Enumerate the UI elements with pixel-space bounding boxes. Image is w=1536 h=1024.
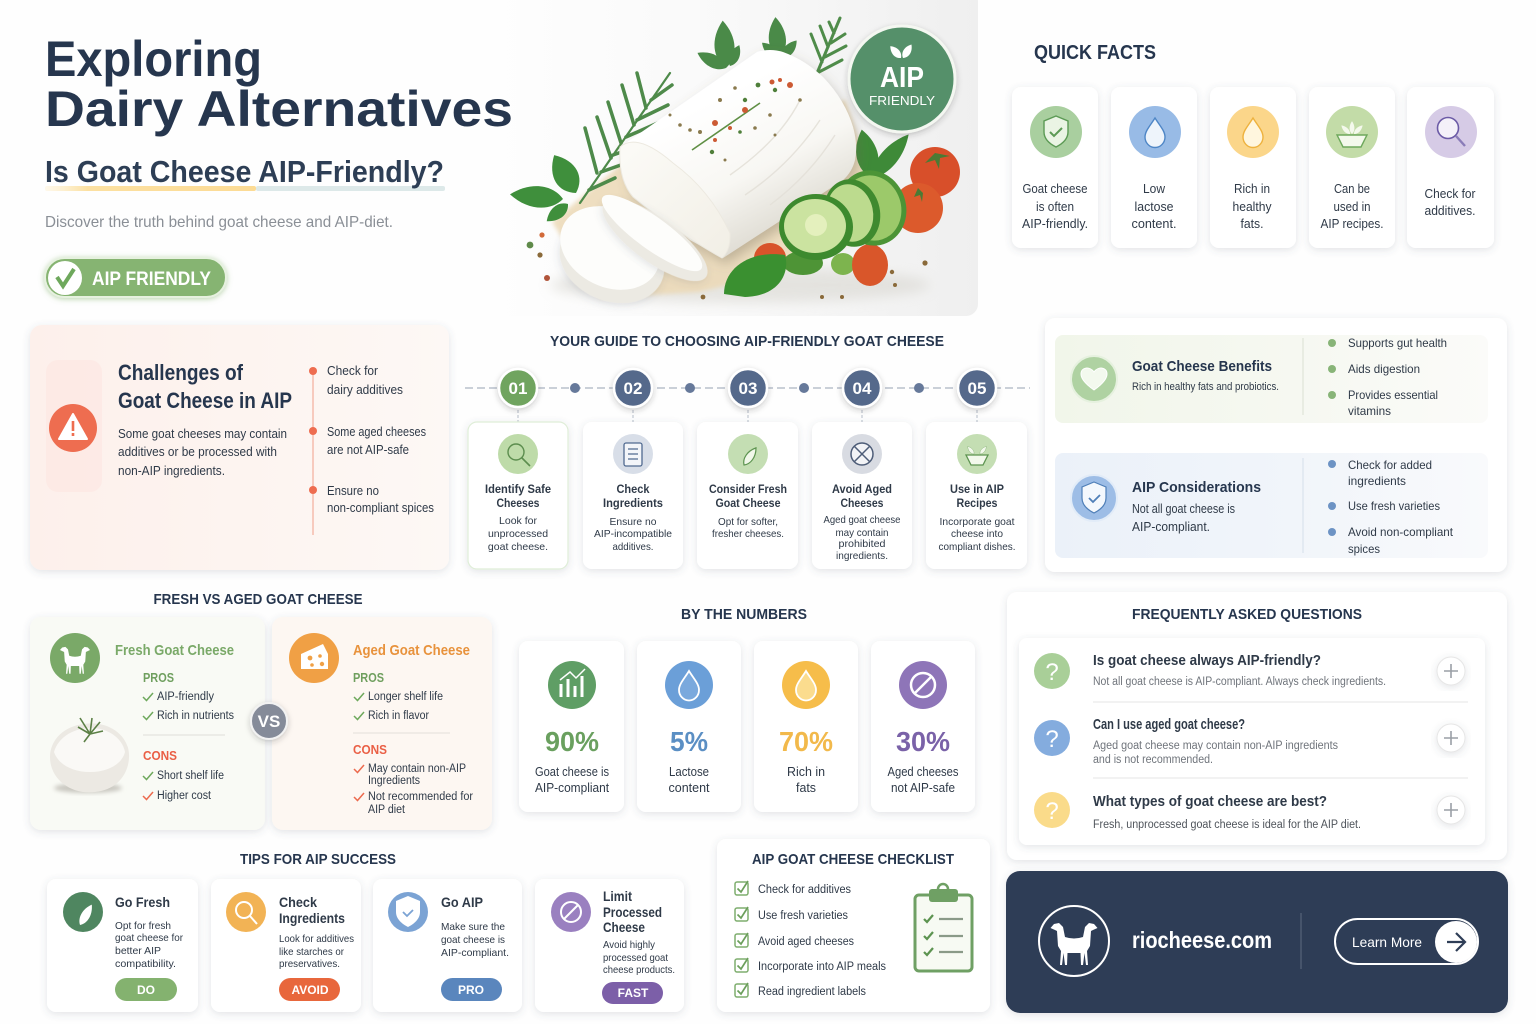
fact card: low lactose [1111, 87, 1197, 248]
aged goat cheese card: Not recommended for [368, 791, 473, 803]
aged goat cheese card: AIP diet [368, 804, 406, 816]
heading: quick facts: QUICK FACTS [1034, 42, 1156, 64]
challenges list: Some aged cheeses [327, 425, 426, 439]
tip: limit processed cheese: Cheese [603, 919, 645, 935]
challenges description: non-AIP ingredients. [118, 463, 225, 478]
step 01: unprocessed [488, 528, 548, 540]
panel: AIP goat cheese checklist [717, 839, 990, 1012]
AIP friendly pill [45, 258, 226, 297]
tip: go fresh: DO [137, 983, 155, 997]
aged goat cheese card: Longer shelf life [368, 691, 443, 703]
fact card: additives [1407, 87, 1494, 248]
step 04: 04 [853, 379, 872, 398]
goat cheese benefits: Provides essential [1348, 388, 1438, 402]
fact card: AIP recipes [1309, 87, 1395, 248]
step 05: Use in AIP [950, 482, 1004, 496]
AIP considerations: ingredients [1348, 474, 1406, 488]
stat: 30%: not AIP-safe [891, 781, 955, 795]
stat: 70%: Rich in [787, 765, 825, 779]
question 3: Fresh, unprocessed goat cheese is ideal for the AIP diet. [1093, 819, 1361, 831]
question 2: Aged goat cheese may contain non-AIP ingredients [1093, 740, 1338, 752]
checklist items: Check for additives [758, 884, 851, 896]
learn more button [1335, 919, 1478, 964]
fresh goat cheese card: AIP-friendly [157, 691, 214, 703]
heading: challenges: Goat Cheese in AIP [118, 388, 292, 413]
step 02: additives. [612, 541, 654, 553]
fresh goat cheese card: CONS [143, 749, 177, 763]
panel: by the numbers [519, 606, 975, 812]
step 02: Check [616, 482, 650, 496]
tip: go fresh: better AIP [115, 945, 161, 957]
tip: go fresh: compatibility. [115, 958, 176, 970]
main title: Dairy Alternatives [45, 81, 513, 137]
tip: check ingredients: Check [279, 894, 317, 910]
VS badge: VS [258, 712, 280, 731]
log cut face [620, 142, 730, 258]
cucumber slices [779, 161, 916, 260]
step 01: 01 [509, 379, 527, 398]
tomato behind basil [754, 243, 786, 273]
step 01 [468, 369, 568, 569]
stat: 5%: content [668, 781, 710, 795]
tip: check ingredients: Ingredients [279, 910, 345, 926]
step 01: goat cheese. [488, 541, 548, 553]
tip: check ingredients: AVOID [291, 983, 329, 997]
hero banner [45, 0, 978, 318]
heading: by the numbers: BY THE NUMBERS [681, 606, 807, 623]
AIP considerations: AIP Considerations [1132, 479, 1261, 496]
heading: fresh vs aged: FRESH VS AGED GOAT CHEESE [154, 591, 362, 608]
question 3 [1034, 792, 1465, 831]
step 01: Identify Safe [485, 482, 551, 496]
fact card: low lactose: lactose [1134, 199, 1174, 214]
tip: limit processed cheese: cheese products. [603, 964, 675, 976]
step 03: Goat Cheese [716, 496, 781, 510]
step 03 [697, 369, 798, 569]
step 04: Cheeses [840, 496, 884, 510]
AIP considerations: Use fresh varieties [1348, 499, 1440, 513]
goat cheese benefits: Supports gut health [1348, 336, 1447, 350]
fact card: AIP recipes: AIP recipes. [1320, 216, 1384, 231]
aged goat cheese card: Aged Goat Cheese [353, 642, 470, 659]
fact card: AIP-friendly: Goat cheese [1022, 181, 1088, 196]
tip: go fresh: goat cheese for [115, 932, 183, 944]
stat: 30% [871, 641, 975, 812]
panel: quick facts [1012, 42, 1494, 248]
step 05 [926, 369, 1027, 569]
hero tagline: Discover the truth behind goat cheese and AIP-diet. [45, 214, 393, 231]
AIP considerations: Avoid non-compliant [1348, 525, 1454, 539]
fact card: healthy fats [1210, 87, 1296, 248]
wooden board [552, 100, 872, 298]
question 3: What types of goat cheese are best? [1093, 793, 1327, 810]
stat: 30%: 30% [896, 726, 950, 757]
challenges list [309, 364, 434, 535]
cheese photo illustration [509, 16, 960, 318]
fact card: low lactose: Low [1143, 181, 1166, 196]
fresh goat cheese card: Short shelf life [157, 770, 224, 782]
tip: go AIP: PRO [458, 983, 484, 997]
tip: go AIP: goat cheese is [441, 934, 505, 946]
cheese slice leaning on disc [591, 184, 719, 295]
cheese disc front [546, 190, 677, 318]
stat: 5%: 5% [670, 726, 708, 757]
panel: tips for AIP success [47, 851, 684, 1012]
step 04 [812, 369, 912, 569]
fact card: additives: Check for [1424, 186, 1476, 201]
heading: challenges [118, 360, 292, 413]
crumbs and spices [527, 232, 928, 299]
stat: 30%: Aged cheeses [888, 765, 958, 779]
badge leaf icon [888, 43, 915, 60]
step 05: Incorporate goat [940, 516, 1015, 528]
heading: challenges: Challenges of [118, 360, 244, 385]
leaves behind log right [851, 127, 915, 183]
step 04: may contain [836, 527, 889, 539]
website name: riocheese.com [1132, 927, 1272, 953]
step 04: ingredients. [836, 550, 888, 562]
panel: fresh vs aged [30, 591, 492, 830]
rosemary sprig [580, 73, 672, 203]
goat cheese benefits: Rich in healthy fats and probiotics. [1132, 381, 1279, 393]
tip: go AIP [373, 879, 522, 1012]
fresh goat cheese card: Fresh Goat Cheese [115, 642, 234, 659]
question 2: Can I use aged goat cheese? [1093, 716, 1245, 733]
question 2: and is not recommended. [1093, 754, 1213, 766]
learn more button: Learn More [1352, 934, 1422, 950]
step 05: Recipes [956, 496, 998, 510]
tip: go AIP: AIP-compliant. [441, 947, 509, 959]
step 02: 02 [624, 379, 642, 398]
heading: checklist: AIP GOAT CHEESE CHECKLIST [752, 851, 954, 868]
round AIP friendly badge: AIP [880, 62, 924, 94]
step 05: cheese into [951, 528, 1003, 540]
step 03: 03 [739, 379, 757, 398]
checklist items: Read ingredient labels [758, 986, 866, 998]
round AIP friendly badge [849, 26, 955, 132]
AIP considerations [1055, 453, 1488, 558]
panel: FAQ [1007, 592, 1507, 860]
tip: check ingredients: Look for additives [279, 933, 354, 945]
AIP considerations: Not all goat cheese is [1132, 502, 1235, 516]
tomato wedge [852, 244, 888, 286]
stat: 5% [637, 641, 741, 812]
tip: limit processed cheese: Processed [603, 904, 662, 920]
step 03: fresher cheeses. [712, 528, 784, 540]
AIP friendly pill: AIP FRIENDLY [92, 269, 211, 290]
fresh goat cheese card: Rich in nutrients [157, 710, 234, 722]
tip: check ingredients [211, 879, 361, 1012]
aged goat cheese card: May contain non-AIP [368, 763, 466, 775]
fact card: healthy fats: healthy [1232, 199, 1272, 214]
top herbs [694, 16, 800, 74]
tip: limit processed cheese: Limit [603, 888, 632, 904]
heading: tips: TIPS FOR AIP SUCCESS [240, 851, 396, 868]
AIP considerations: AIP-compliant. [1132, 520, 1210, 534]
fact card: healthy fats: Rich in [1234, 181, 1270, 196]
tip: go fresh [47, 879, 198, 1012]
tip: limit processed cheese: FAST [618, 986, 649, 1000]
aged goat cheese card: PROS [353, 671, 384, 685]
aged goat cheese card [272, 617, 492, 830]
stat: 90% [519, 641, 624, 812]
VS badge [251, 703, 287, 739]
panel: benefits and considerations [1045, 318, 1507, 572]
fact card: AIP recipes: Can be [1334, 181, 1370, 196]
challenges list: dairy additives [327, 383, 403, 397]
AIP considerations: Check for added [1348, 458, 1432, 472]
goat cheese benefits: Aids digestion [1348, 362, 1420, 376]
aged goat cheese card: Ingredients [368, 775, 420, 787]
basil leaf bottom [724, 254, 786, 297]
aged goat cheese card: Rich in flavor [368, 710, 429, 722]
tip: go AIP: Go AIP [441, 894, 483, 910]
fresh goat cheese card [30, 617, 265, 830]
fresh goat cheese card: Higher cost [157, 790, 212, 802]
photo: round of goat cheese [50, 718, 129, 793]
question 1: ? [1045, 659, 1059, 686]
question 1 [1034, 652, 1465, 689]
icon: goat logo [1039, 906, 1109, 976]
top right rosemary sprig [811, 18, 846, 78]
question 1: Not all goat cheese is AIP-compliant. Always check ingredients. [1093, 676, 1386, 688]
icon: clipboard [915, 884, 972, 971]
fact card: additives: additives. [1424, 203, 1476, 218]
stat: 90%: 90% [545, 726, 599, 757]
stat: 90%: Goat cheese is [535, 765, 609, 779]
fresh goat cheese card: PROS [143, 671, 174, 685]
fact card: AIP-friendly [1012, 87, 1098, 248]
question 2 [1034, 716, 1465, 766]
step 04: Aged goat cheese [824, 514, 901, 526]
challenges description [118, 426, 287, 478]
step 03: Opt for softer, [718, 516, 778, 528]
herb speckles [668, 78, 802, 162]
heading: guide: YOUR GUIDE TO CHOOSING AIP-FRIENDLY GOAT CHEESE [550, 333, 944, 350]
stat: 70%: fats [796, 781, 816, 795]
goat cheese benefits [1055, 335, 1488, 423]
stat: 5%: Lactose [669, 765, 709, 779]
soft ground shadow [550, 267, 930, 303]
step 03: Consider Fresh [709, 482, 787, 496]
tip: check ingredients: preservatives. [279, 958, 340, 970]
step 02: AIP-incompatible [594, 528, 672, 540]
question 1: Is goat cheese always AIP-friendly? [1093, 652, 1321, 669]
basil leaves left [509, 149, 586, 226]
checklist items: Use fresh varieties [758, 910, 848, 922]
tip: limit processed cheese: processed goat [603, 952, 668, 964]
panel: challenges of goat cheese in AIP [30, 325, 449, 570]
step 01: Cheeses [496, 496, 540, 510]
fact card: AIP-friendly: is often [1036, 199, 1074, 214]
challenges list: Ensure no [327, 484, 379, 498]
fact card: AIP-friendly: AIP-friendly. [1022, 216, 1088, 231]
step 05: compliant dishes. [938, 541, 1016, 553]
goat cheese benefits: Goat Cheese Benefits [1132, 358, 1272, 375]
small cucumber piece [783, 251, 823, 275]
tip: go fresh: Opt for fresh [115, 920, 171, 932]
tip: go fresh: Go Fresh [115, 894, 170, 910]
step 01: Look for [499, 515, 537, 527]
AIP considerations: spices [1348, 542, 1380, 556]
round AIP friendly badge: FRIENDLY [869, 93, 935, 108]
icon: warning [46, 360, 102, 492]
aged goat cheese card: CONS [353, 743, 387, 757]
stat: 70% [754, 641, 858, 812]
main title: Exploring [45, 31, 262, 87]
panel: step guide [465, 333, 1030, 569]
checklist items: Avoid aged cheeses [758, 936, 854, 948]
checklist items: Incorporate into AIP meals [758, 961, 886, 973]
main title [45, 31, 513, 137]
fact card: healthy fats: fats. [1240, 216, 1264, 231]
challenges description: Some goat cheeses may contain [118, 426, 287, 441]
challenges list: non-compliant spices [327, 501, 434, 515]
step 02: Ingredients [603, 496, 663, 510]
step 02: Ensure no [610, 516, 657, 528]
checklist items [735, 881, 886, 998]
fact card: low lactose: content. [1132, 216, 1176, 231]
question 2: ? [1045, 726, 1059, 753]
tip: check ingredients: like starches or [279, 946, 344, 958]
tip: limit processed cheese: Avoid highly [603, 939, 656, 951]
timeline [465, 383, 1030, 422]
step 05: 05 [968, 379, 986, 398]
step 02 [583, 369, 683, 569]
step 04: prohibited [838, 538, 886, 550]
stat: 70%: 70% [779, 726, 833, 757]
question 3: ? [1045, 798, 1059, 825]
challenges list: Check for [327, 364, 378, 378]
hero photo backdrop [480, 0, 978, 316]
panel: website footer [1006, 871, 1508, 1013]
tomatoes [910, 147, 960, 197]
tip: limit processed cheese [535, 879, 684, 1012]
challenges list: are not AIP-safe [327, 443, 409, 457]
heading: FAQ: FREQUENTLY ASKED QUESTIONS [1132, 606, 1362, 623]
step 04: Avoid Aged [832, 482, 892, 496]
stat: 90%: AIP-compliant [535, 781, 609, 795]
tip: go AIP: Make sure the [441, 921, 505, 933]
goat cheese log [620, 50, 856, 258]
challenges description: additives or be processed with [118, 444, 277, 459]
fact card: AIP recipes: used in [1334, 199, 1370, 214]
subtitle with highlighter underline: Is Goat Cheese AIP-Friendly? [45, 154, 444, 189]
log surface texture [730, 100, 835, 205]
FAQ inner card [1019, 638, 1485, 845]
goat cheese benefits: vitamins [1348, 404, 1391, 418]
